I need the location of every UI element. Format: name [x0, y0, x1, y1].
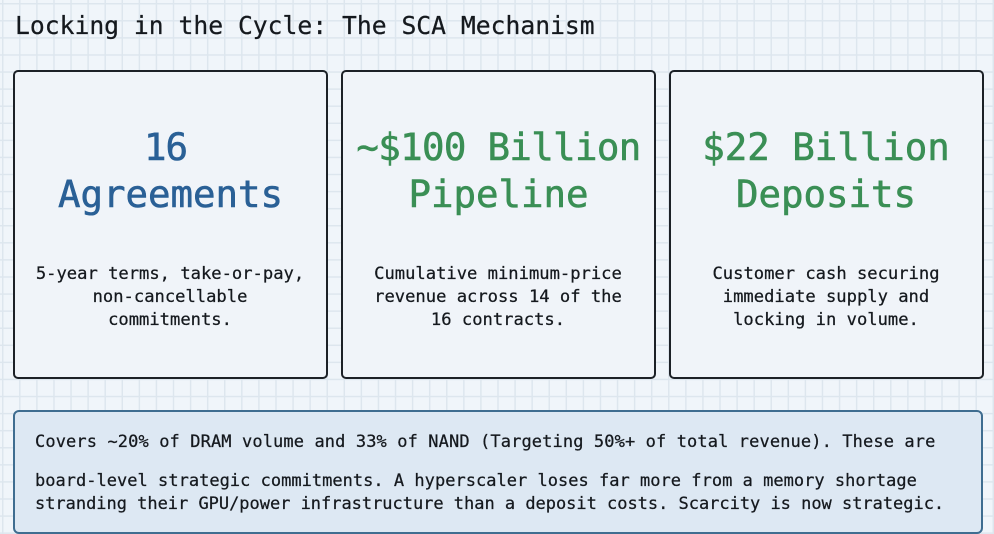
- stat: 16 Agreements: [58, 125, 283, 216]
- description: deposits: Customer cash securing immediate supply and locking in volume.: [712, 264, 940, 330]
- stat: 16 Agreements: Agreements: [58, 172, 283, 216]
- callout: strategic summary: [13, 410, 983, 534]
- title: Locking in the Cycle: The SCA Mechanism: [15, 11, 595, 40]
- stat: ~$100 Billion Pipeline: Pipeline: [408, 172, 589, 216]
- stat: $22 Billion Deposits: Deposits: [736, 172, 916, 216]
- description: pipeline: Cumulative minimum-price revenue across 14 of the 16 contracts.: [374, 264, 622, 330]
- panel: 22 billion deposits: [669, 70, 984, 379]
- stat: ~$100 Billion Pipeline: ~$100 Billion: [356, 125, 641, 169]
- callout lines 2 and 3: stranding their GPU/power infrastructure than a deposit costs. Scarcity is now strategic.: [35, 494, 944, 514]
- description: agreements: 5-year terms, take-or-pay, non-cancellable commitments.: [36, 264, 304, 330]
- callout line 1: Covers ~20% of DRAM volume and 33% of NAND (Targeting 50%+ of total revenue). These are: [35, 432, 935, 452]
- panel: 16 agreements: [13, 70, 328, 379]
- callout lines 2 and 3: board-level strategic commitments. A hyperscaler loses far more from a memory shortage: [35, 471, 917, 491]
- stat: ~$100 Billion Pipeline: [356, 125, 641, 216]
- panel: 100 billion pipeline: [341, 70, 656, 379]
- stat: $22 Billion Deposits: [702, 125, 950, 216]
- stat: 16 Agreements: 16: [144, 125, 187, 169]
- stat: $22 Billion Deposits: $22 Billion: [702, 125, 950, 169]
- callout lines 2 and 3: [35, 471, 944, 514]
